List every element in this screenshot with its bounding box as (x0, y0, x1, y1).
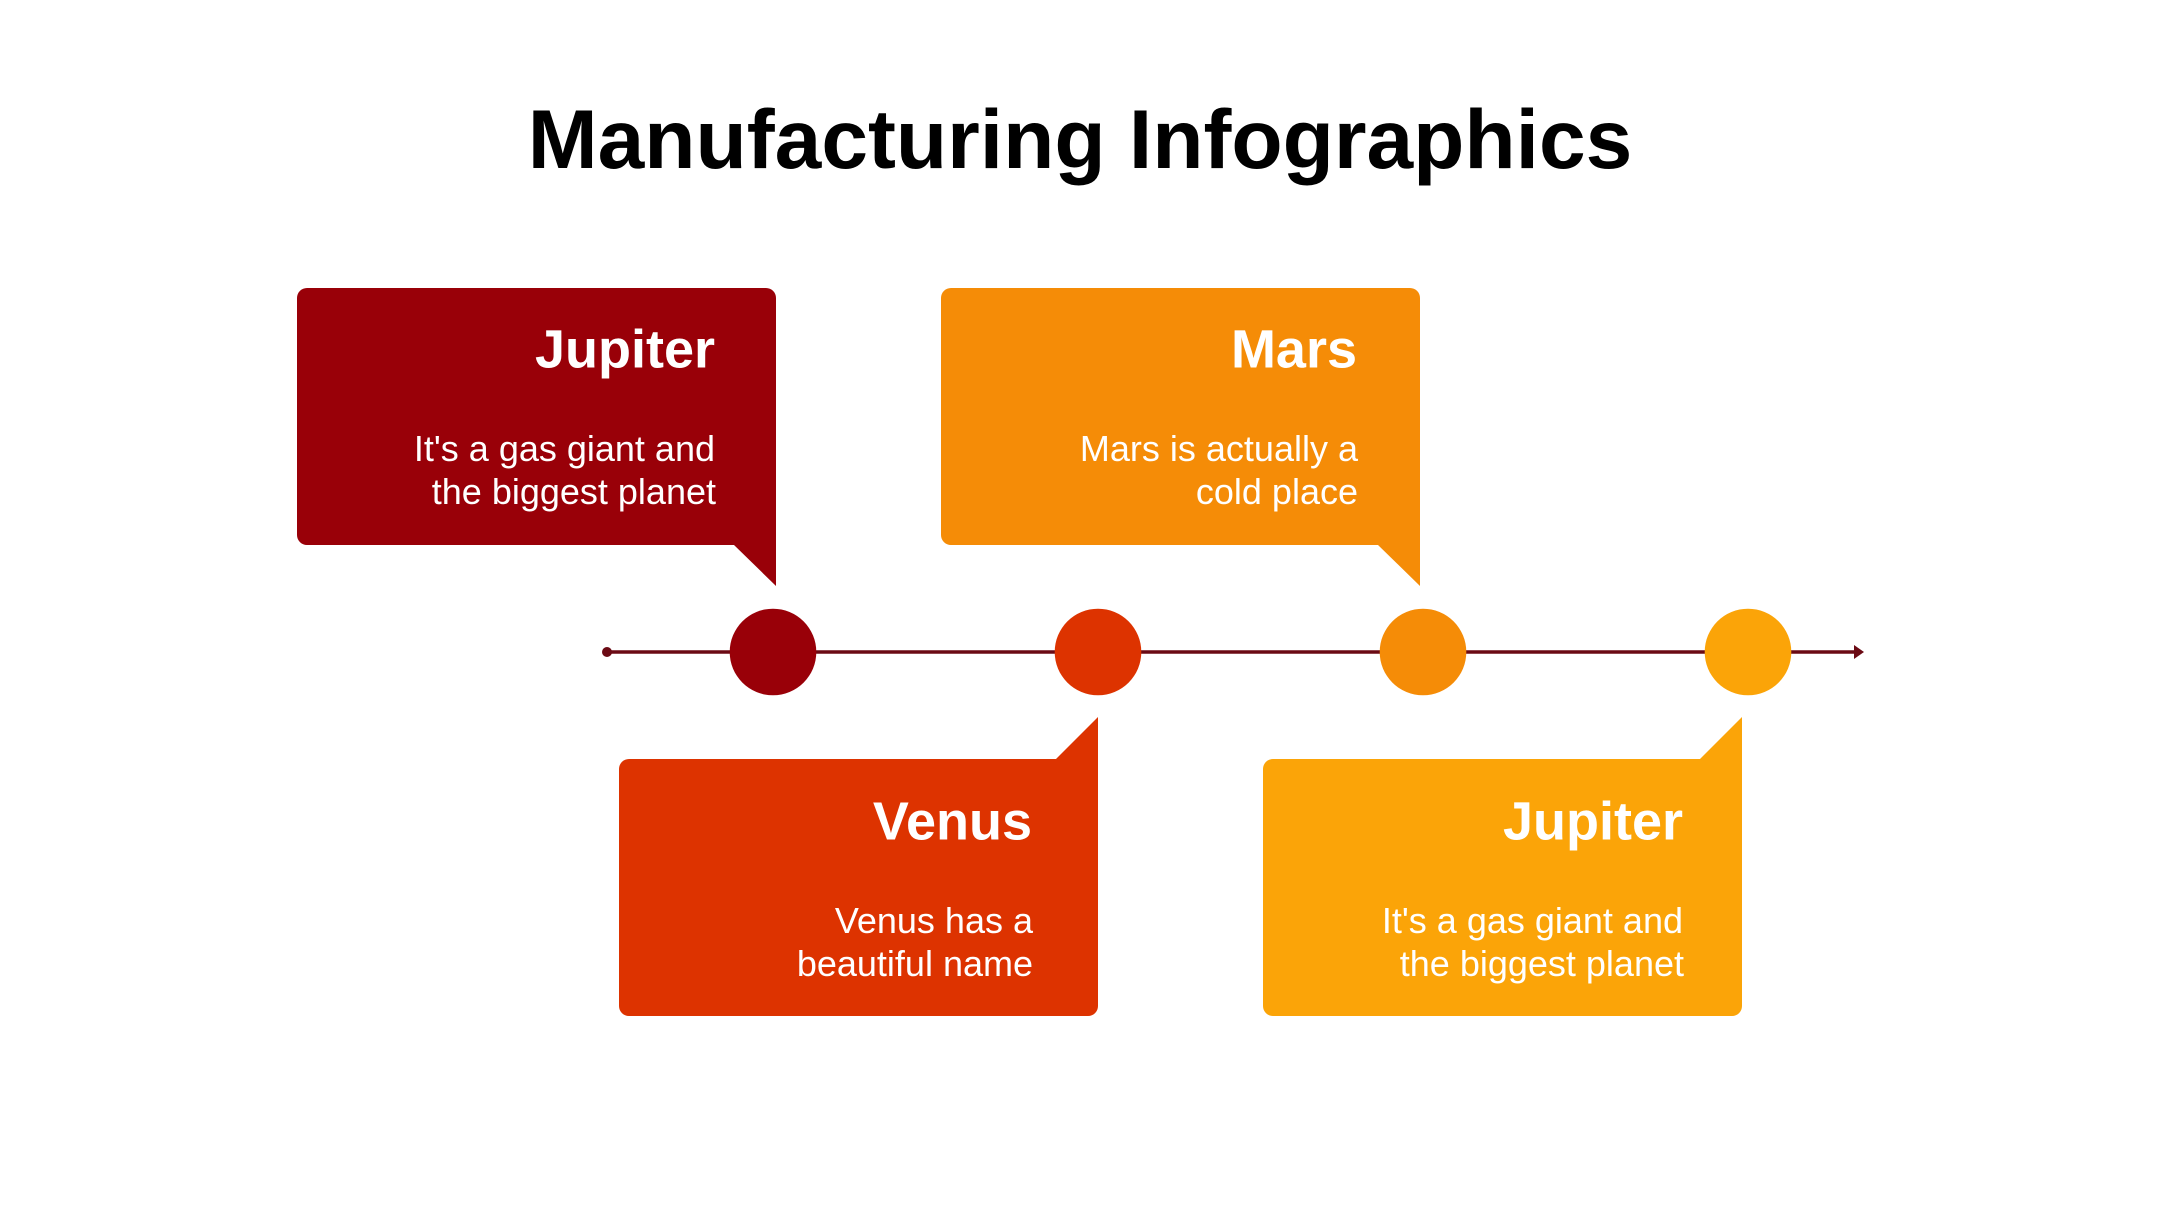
text: Jupiter description: It's a gas giant and (1382, 900, 1683, 941)
title: Manufacturing Infographics (528, 92, 1632, 186)
callout: Jupiter bottom (1263, 717, 1742, 1016)
callout: Mars (941, 288, 1420, 586)
callout: Jupiter top (297, 288, 776, 586)
timeline node 1 (730, 609, 816, 695)
text: Jupiter description: It's a gas giant and (414, 428, 715, 469)
heading: Mars: Mars (1231, 320, 1357, 380)
callout: Venus (619, 717, 1098, 1016)
heading: Jupiter: Jupiter (535, 320, 715, 380)
text: Mars description: cold place (1196, 471, 1358, 512)
timeline node 4 (1705, 609, 1791, 695)
timeline node 3 (1380, 609, 1466, 695)
heading: Jupiter: Jupiter (1503, 792, 1683, 852)
timeline node 2 (1055, 609, 1141, 695)
heading: Venus: Venus (873, 792, 1032, 852)
text: Venus description: beautiful name (797, 943, 1033, 984)
text: Venus description: Venus has a (835, 900, 1034, 941)
text: Mars description: Mars is actually a (1080, 428, 1359, 469)
text: Jupiter description: the biggest planet (1400, 943, 1684, 984)
timeline arrow (602, 645, 1864, 659)
text: Jupiter description: the biggest planet (432, 471, 716, 512)
